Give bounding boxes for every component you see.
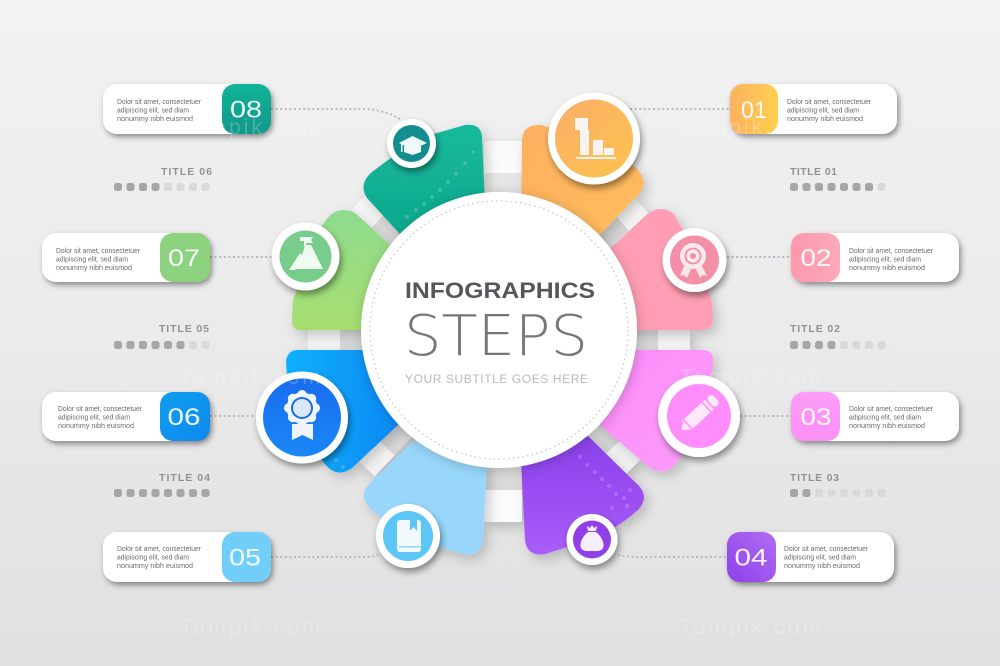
rating: title 02 xyxy=(790,323,886,349)
rating: title 04: TITLE 04 xyxy=(159,472,210,484)
card 05: 05 xyxy=(229,544,261,572)
panel: petal 04 purple xyxy=(521,436,644,554)
subtitle: YOUR SUBTITLE GOES HERE xyxy=(405,372,588,386)
icon: bar chart on orange xyxy=(548,92,640,184)
card 06 xyxy=(42,392,210,441)
card 04: 04 xyxy=(734,544,768,572)
rating: title 05 xyxy=(114,323,210,349)
card 07: nonummy nibh euismod xyxy=(56,265,132,272)
panel: petal 03 magenta xyxy=(590,350,713,471)
central circle xyxy=(361,192,637,468)
rating: title 06: TITLE 06 xyxy=(161,166,212,178)
panel: petal 06 blue xyxy=(286,350,410,472)
rating: title 01: TITLE 01 xyxy=(790,166,837,178)
rating: title 05: TITLE 05 xyxy=(159,323,209,335)
watermarks: Tampik.com xyxy=(180,116,320,139)
radial connector bars xyxy=(308,141,690,522)
panel: petal 07 green xyxy=(292,210,410,330)
rating: title 03: TITLE 03 xyxy=(790,472,839,484)
icon: rosette on blue xyxy=(256,372,348,464)
card 07 xyxy=(42,233,210,282)
panel: petal 08 teal xyxy=(363,125,487,250)
card 04: Dolor sit amet, consectetuer xyxy=(784,546,869,553)
card 02: adipiscing elit, sed diam xyxy=(849,256,921,264)
icon: book on light blue xyxy=(376,504,440,568)
card 06: adipiscing elit, sed diam xyxy=(58,414,130,422)
card 08: Dolor sit amet, consectetuer xyxy=(117,99,202,106)
card 04 xyxy=(727,532,894,582)
rating: title 03 xyxy=(790,472,886,497)
icon: target award on pink xyxy=(662,228,726,292)
icon: pencil on magenta xyxy=(658,375,740,457)
card 02: Dolor sit amet, consectetuer xyxy=(849,248,934,255)
panel: petal 05 light blue xyxy=(364,441,487,554)
panel: petal 02 pink xyxy=(590,209,713,330)
card 06: Dolor sit amet, consectetuer xyxy=(58,406,143,413)
rating: title 04 xyxy=(114,472,210,497)
card 01 xyxy=(730,84,897,134)
rating: title 06 xyxy=(114,166,212,191)
watermarks: Tampik.com xyxy=(680,116,820,139)
title: steps: STEPS xyxy=(404,304,588,369)
card 03: 03 xyxy=(800,404,832,431)
watermarks: Tampik.com xyxy=(680,616,820,639)
rating: title 01 xyxy=(790,166,886,191)
icon: money bag on purple xyxy=(566,514,618,565)
dotted connectors xyxy=(210,109,791,557)
card 03: nonummy nibh euismod xyxy=(849,423,925,430)
card 08: adipiscing elit, sed diam xyxy=(117,108,189,114)
card 03: adipiscing elit, sed diam xyxy=(849,414,921,422)
card 02 xyxy=(791,233,959,282)
card 03: Dolor sit amet, consectetuer xyxy=(849,406,934,413)
watermarks xyxy=(180,116,820,639)
card 01: Dolor sit amet, consectetuer xyxy=(787,99,872,106)
watermarks: Tampik.com xyxy=(180,366,320,389)
petal dot accents xyxy=(334,150,632,510)
card 01: adipiscing elit, sed diam xyxy=(787,108,859,114)
watermarks: Tampik.com xyxy=(680,366,820,389)
card 02: nonummy nibh euismod xyxy=(849,265,925,272)
card 01: 01 xyxy=(741,97,767,124)
card 07: adipiscing elit, sed diam xyxy=(56,256,128,264)
card 08: nonummy nibh euismod xyxy=(117,116,193,123)
card 04: nonummy nibh euismod xyxy=(784,563,860,570)
panel: petal 01 orange xyxy=(521,125,644,250)
card 07: 07 xyxy=(168,245,200,272)
rating: title 02: TITLE 02 xyxy=(790,323,840,335)
icon: mountain flag on green xyxy=(272,222,340,290)
card 04: adipiscing elit, sed diam xyxy=(784,554,856,562)
card 05: nonummy nibh euismod xyxy=(117,563,193,570)
card 08: 08 xyxy=(230,96,262,124)
card 05: Dolor sit amet, consectetuer xyxy=(117,546,202,553)
card 06: nonummy nibh euismod xyxy=(58,423,134,430)
card 03 xyxy=(791,392,959,441)
card 05 xyxy=(103,532,271,582)
watermarks: Tampik.com xyxy=(180,616,320,639)
card 01: nonummy nibh euismod xyxy=(787,116,863,123)
icon: graduation cap on teal xyxy=(387,119,436,168)
card 05: adipiscing elit, sed diam xyxy=(117,554,189,562)
card 02: 02 xyxy=(800,245,832,272)
card 08 xyxy=(103,84,271,134)
card 07: Dolor sit amet, consectetuer xyxy=(56,248,141,255)
card 06: 06 xyxy=(168,404,200,431)
title: infographics: INFOGRAPHICS xyxy=(405,278,595,303)
